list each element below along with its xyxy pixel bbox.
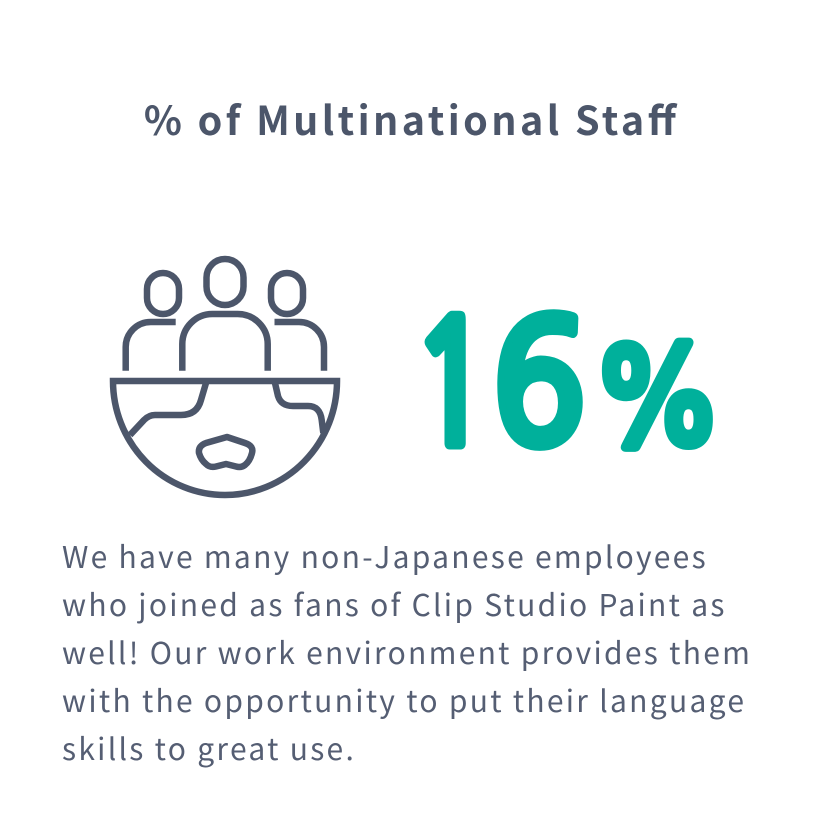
big number 16%: % bbox=[592, 334, 724, 466]
big number 16%: 6 bbox=[491, 300, 587, 471]
body text bbox=[62, 533, 752, 769]
body text: who joined as fans of Clip Studio Paint as bbox=[62, 581, 727, 625]
big number 16%: 1 bbox=[410, 300, 494, 471]
body text: skills to great use. bbox=[62, 725, 356, 769]
body text: with the opportunity to put their language bbox=[62, 677, 746, 721]
body text: We have many non-Japanese employees bbox=[62, 533, 708, 577]
body text: well! Our work environment provides them bbox=[62, 629, 752, 673]
title: % of Multinational Staff bbox=[144, 90, 676, 147]
